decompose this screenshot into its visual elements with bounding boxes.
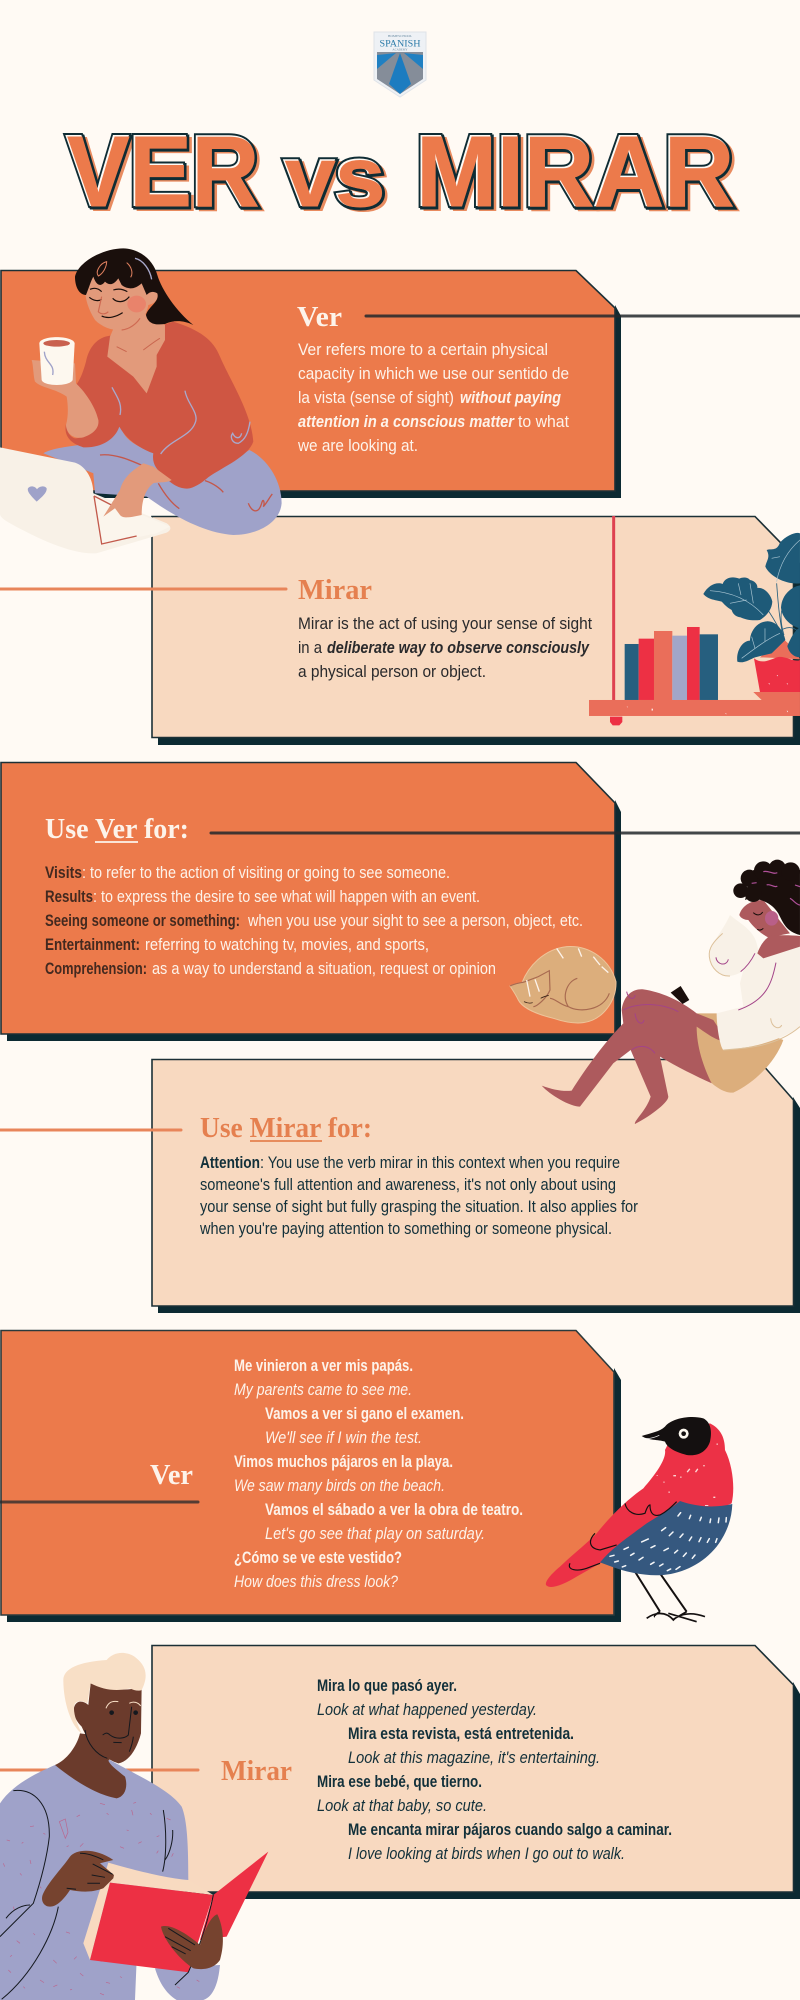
text: Mirar examples: Me encanta mirar pájaros cuando salgo a caminar. [348,1821,672,1839]
text: Mirar examples: Mira esta revista, está entretenida. [348,1725,574,1743]
title: VER vs MIRAR: vs [286,130,386,224]
text: uses of Ver list: Results [45,888,93,906]
panel: Ver definition [1,270,800,498]
text: uses of Ver list [45,864,583,978]
heading: Mirar: Mirar [298,575,372,606]
illustration: sleeping cat [510,947,616,1023]
title: VER vs MIRAR: VER [68,116,260,228]
illustration: potted plant [703,533,800,700]
text: Ver definition body: la vista (sense of sight) [298,389,454,407]
text: Mirar definition body: Mirar is the act of using your sense of sight [298,615,592,633]
text: Mirar examples: Look at what happened yesterday. [317,1701,537,1719]
text: Mirar definition body: deliberate way to observe consciously [327,639,590,657]
text: uses of Mirar: Attention [200,1154,260,1172]
text: Ver examples: Vamos a ver si gano el examen. [265,1405,464,1423]
text: Ver definition body: Ver refers more to a certain physical [298,341,548,359]
title: VER vs MIRAR: vs [285,130,385,224]
panel: Use Ver for [1,762,800,1041]
logo: Homeschool Spanish Academy shield: SPANISH [380,40,421,50]
illustration: red and blue bird [546,1417,733,1622]
illustration: man reading red book [0,1653,268,2000]
text: uses of Mirar: : You use the verb mirar in this context when you require [260,1154,620,1172]
text: uses of Ver list: Entertainment: [45,936,140,954]
title: VER vs MIRAR: MIRAR [420,118,738,230]
text: uses of Ver list: referring to watching tv, movies, and sports, [145,936,429,954]
logo: Homeschool Spanish Academy shield [374,32,426,97]
illustration: woman with mug and laptop [0,248,282,553]
text: Mirar examples: I love looking at birds when I go out to walk. [348,1845,625,1863]
text: uses of Ver list: : to refer to the action of visiting or going to see someone. [82,864,450,882]
title: VER vs MIRAR: VER [66,115,258,227]
text: Mirar definition body: a physical person or object. [298,663,486,681]
text: Ver examples: Vamos el sábado a ver la obra de teatro. [265,1501,523,1519]
text: Mirar examples: Mira lo que pasó ayer. [317,1677,457,1695]
text: Ver definition body: we are looking at. [297,437,418,455]
panel: Ver examples [0,1330,621,1622]
heading: Mirar: Mirar [221,1756,292,1787]
panel: Mirar definition [0,516,800,745]
panel: Use Mirar for [0,1060,800,1313]
text: uses of Ver list: when you use your sight to see a person, object, etc. [247,912,583,930]
text: Ver definition body: capacity in which we use our sentido de [298,365,569,383]
illustration: woman sitting with phone [542,860,800,1124]
heading: Ver: Ver [150,1460,193,1491]
text: Ver examples: My parents came to see me. [234,1381,412,1399]
text: uses of Mirar [199,1154,638,1238]
text: Ver examples: Me vinieron a ver mis papás. [234,1357,413,1375]
heading: Ver: Ver [297,302,342,333]
text: Ver examples: Vimos muchos pájaros en la playa. [234,1453,453,1471]
text: Ver definition body: to what [518,413,569,431]
text: Mirar definition body [298,615,592,681]
text: uses of Ver list: Comprehension: [45,960,147,978]
title: VER vs MIRAR: vs [288,132,388,226]
heading: Use Mirar for: Use Mirar for: [200,1113,372,1144]
title: VER vs MIRAR: VER [67,116,259,228]
illustration: bookshelf with books [589,516,800,725]
panel: Mirar examples [0,1646,800,1899]
title: VER vs MIRAR: vs [284,129,384,223]
text: Ver examples: We'll see if I win the test. [265,1429,422,1447]
text: Ver examples: We saw many birds on the beach. [234,1477,445,1495]
text: Mirar definition body: in a [298,639,323,657]
text: Ver examples: Let's go see that play on saturday. [265,1525,485,1543]
text: Ver examples: ¿Cómo se ve este vestido? [234,1549,402,1567]
title: VER vs MIRAR: MIRAR [415,115,733,227]
text: Mirar examples: Mira ese bebé, que tierno. [317,1773,482,1791]
text: uses of Mirar: someone's full attention and awareness, it's not only about using [200,1176,616,1194]
text: Mirar examples [317,1677,672,1863]
title: VER vs MIRAR: VER [66,115,258,227]
text: uses of Mirar: when you're paying attention to something or someone physical. [199,1220,612,1238]
title: VER vs MIRAR: MIRAR [416,116,734,228]
title: VER vs MIRAR: VER [70,118,262,230]
title: VER vs MIRAR: vs [284,129,384,223]
text: Ver definition body: attention in a conscious matter [298,413,515,431]
text: uses of Ver list: Visits [45,864,82,882]
text: uses of Ver list: as a way to understand a situation, request or opinion [152,960,496,978]
text: uses of Ver list: Seeing someone or something: [45,912,240,930]
text: Ver examples: How does this dress look? [234,1573,399,1591]
logo: Homeschool Spanish Academy shield: HOMESCHOOL [388,34,412,38]
title: VER vs MIRAR: MIRAR [415,115,733,227]
heading: Use Ver for: Use Ver for: [45,814,189,845]
title: VER vs MIRAR [66,115,738,230]
text: Mirar examples: Look at that baby, so cute. [317,1797,487,1815]
text: uses of Ver list: : to express the desire to see what will happen with an event. [93,888,480,906]
text: Ver definition body [297,341,569,455]
title: VER vs MIRAR: MIRAR [416,116,734,228]
logo: Homeschool Spanish Academy shield: ACADEMY [392,48,408,52]
text: Mirar examples: Look at this magazine, it's entertaining. [348,1749,600,1767]
text: uses of Mirar: your sense of sight but fully grasping the situation. It also applies for [200,1198,638,1216]
text: Ver definition body: without paying [460,389,561,407]
text: Ver examples [234,1357,523,1591]
